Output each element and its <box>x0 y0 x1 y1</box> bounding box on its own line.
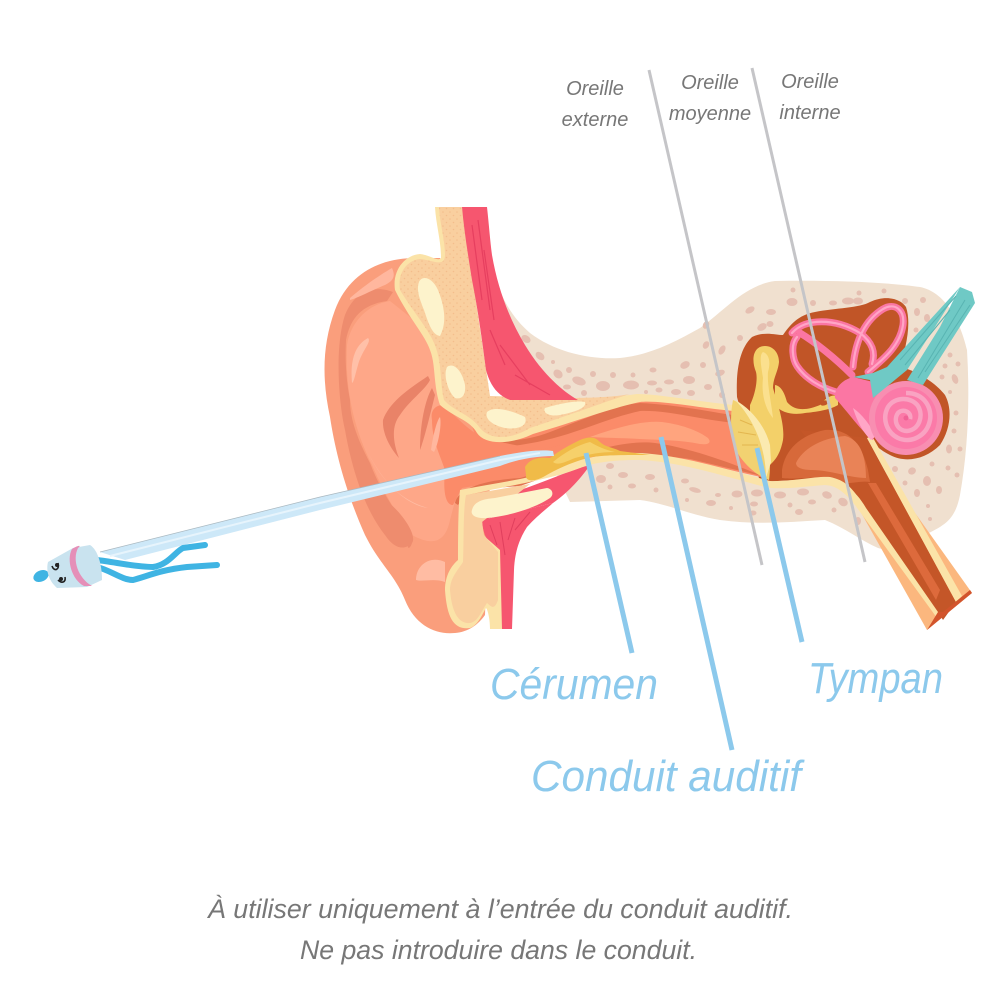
antihelix <box>347 301 458 541</box>
lobe highlight <box>416 560 445 582</box>
label: oreille moyenne: Oreille <box>681 72 739 94</box>
usage note: À utiliser uniquement à l’entrée du conduit auditif. <box>206 894 793 924</box>
divider lines between ear sections <box>649 68 865 565</box>
label: oreille externe: externe <box>562 109 628 131</box>
pointer: cérumen <box>586 453 632 653</box>
helix groove <box>339 289 412 548</box>
bone pores <box>520 288 962 525</box>
usage note: Ne pas introduire dans le conduit. <box>300 935 697 965</box>
pointer: conduit auditif <box>661 437 732 750</box>
vestibulocochlear nerve <box>853 287 975 398</box>
character on swab <box>31 545 217 588</box>
ear canal <box>420 400 765 490</box>
cartilage nodules <box>418 278 585 428</box>
outer ear <box>325 258 560 633</box>
inner tube core <box>800 430 972 630</box>
outer part of internal auditory tube <box>825 470 972 630</box>
tympanic cavity floor <box>782 430 870 483</box>
pointer: tympan <box>757 448 802 642</box>
antihelix crease <box>383 376 430 458</box>
stapes opening <box>819 400 829 406</box>
inner ear labyrinth <box>792 306 943 455</box>
label: cérumen: Cérumen <box>490 660 658 709</box>
lower nodule <box>472 488 552 518</box>
tragus highlight <box>431 417 441 452</box>
malleus <box>750 346 783 465</box>
vestibule highlight <box>853 408 876 440</box>
eardrum <box>731 400 770 480</box>
vestibule <box>835 377 880 440</box>
cerumen earwax <box>525 438 650 480</box>
concha lower shadow <box>455 468 560 505</box>
upper muscle <box>462 207 578 400</box>
swab stick <box>100 450 554 560</box>
eardrum and ossicles <box>731 346 838 480</box>
label: oreille moyenne: moyenne <box>669 103 751 125</box>
middle and inner ear cavity <box>737 298 950 500</box>
pink band <box>70 546 92 586</box>
label: tympan: Tympan <box>808 654 943 703</box>
left pupil <box>55 563 59 567</box>
head <box>47 545 102 588</box>
lower muscle <box>482 465 590 629</box>
tragus crease <box>420 388 435 450</box>
incus and stapes <box>775 385 838 414</box>
lower groove <box>385 500 413 548</box>
blue strings <box>97 545 217 580</box>
label: oreille interne: interne <box>779 102 841 124</box>
helix highlight <box>350 268 394 300</box>
eyes <box>52 563 65 582</box>
temporal bone <box>497 281 968 549</box>
lower cartilage <box>445 453 860 629</box>
label: oreille externe: Oreille <box>566 78 624 100</box>
label: conduit auditif: Conduit auditif <box>531 752 806 801</box>
antihelix highlight <box>365 446 428 508</box>
right pupil <box>59 577 63 581</box>
label: oreille interne: Oreille <box>781 71 839 93</box>
scapha highlight <box>352 338 369 383</box>
upper cartilage <box>395 207 734 442</box>
concha <box>432 405 560 505</box>
semicircular canals <box>792 306 903 393</box>
muscle fibres upper <box>472 220 550 395</box>
malleus highlight <box>761 352 773 418</box>
cochlea <box>869 381 943 455</box>
nose <box>31 568 51 584</box>
eardrum edge <box>735 400 771 478</box>
